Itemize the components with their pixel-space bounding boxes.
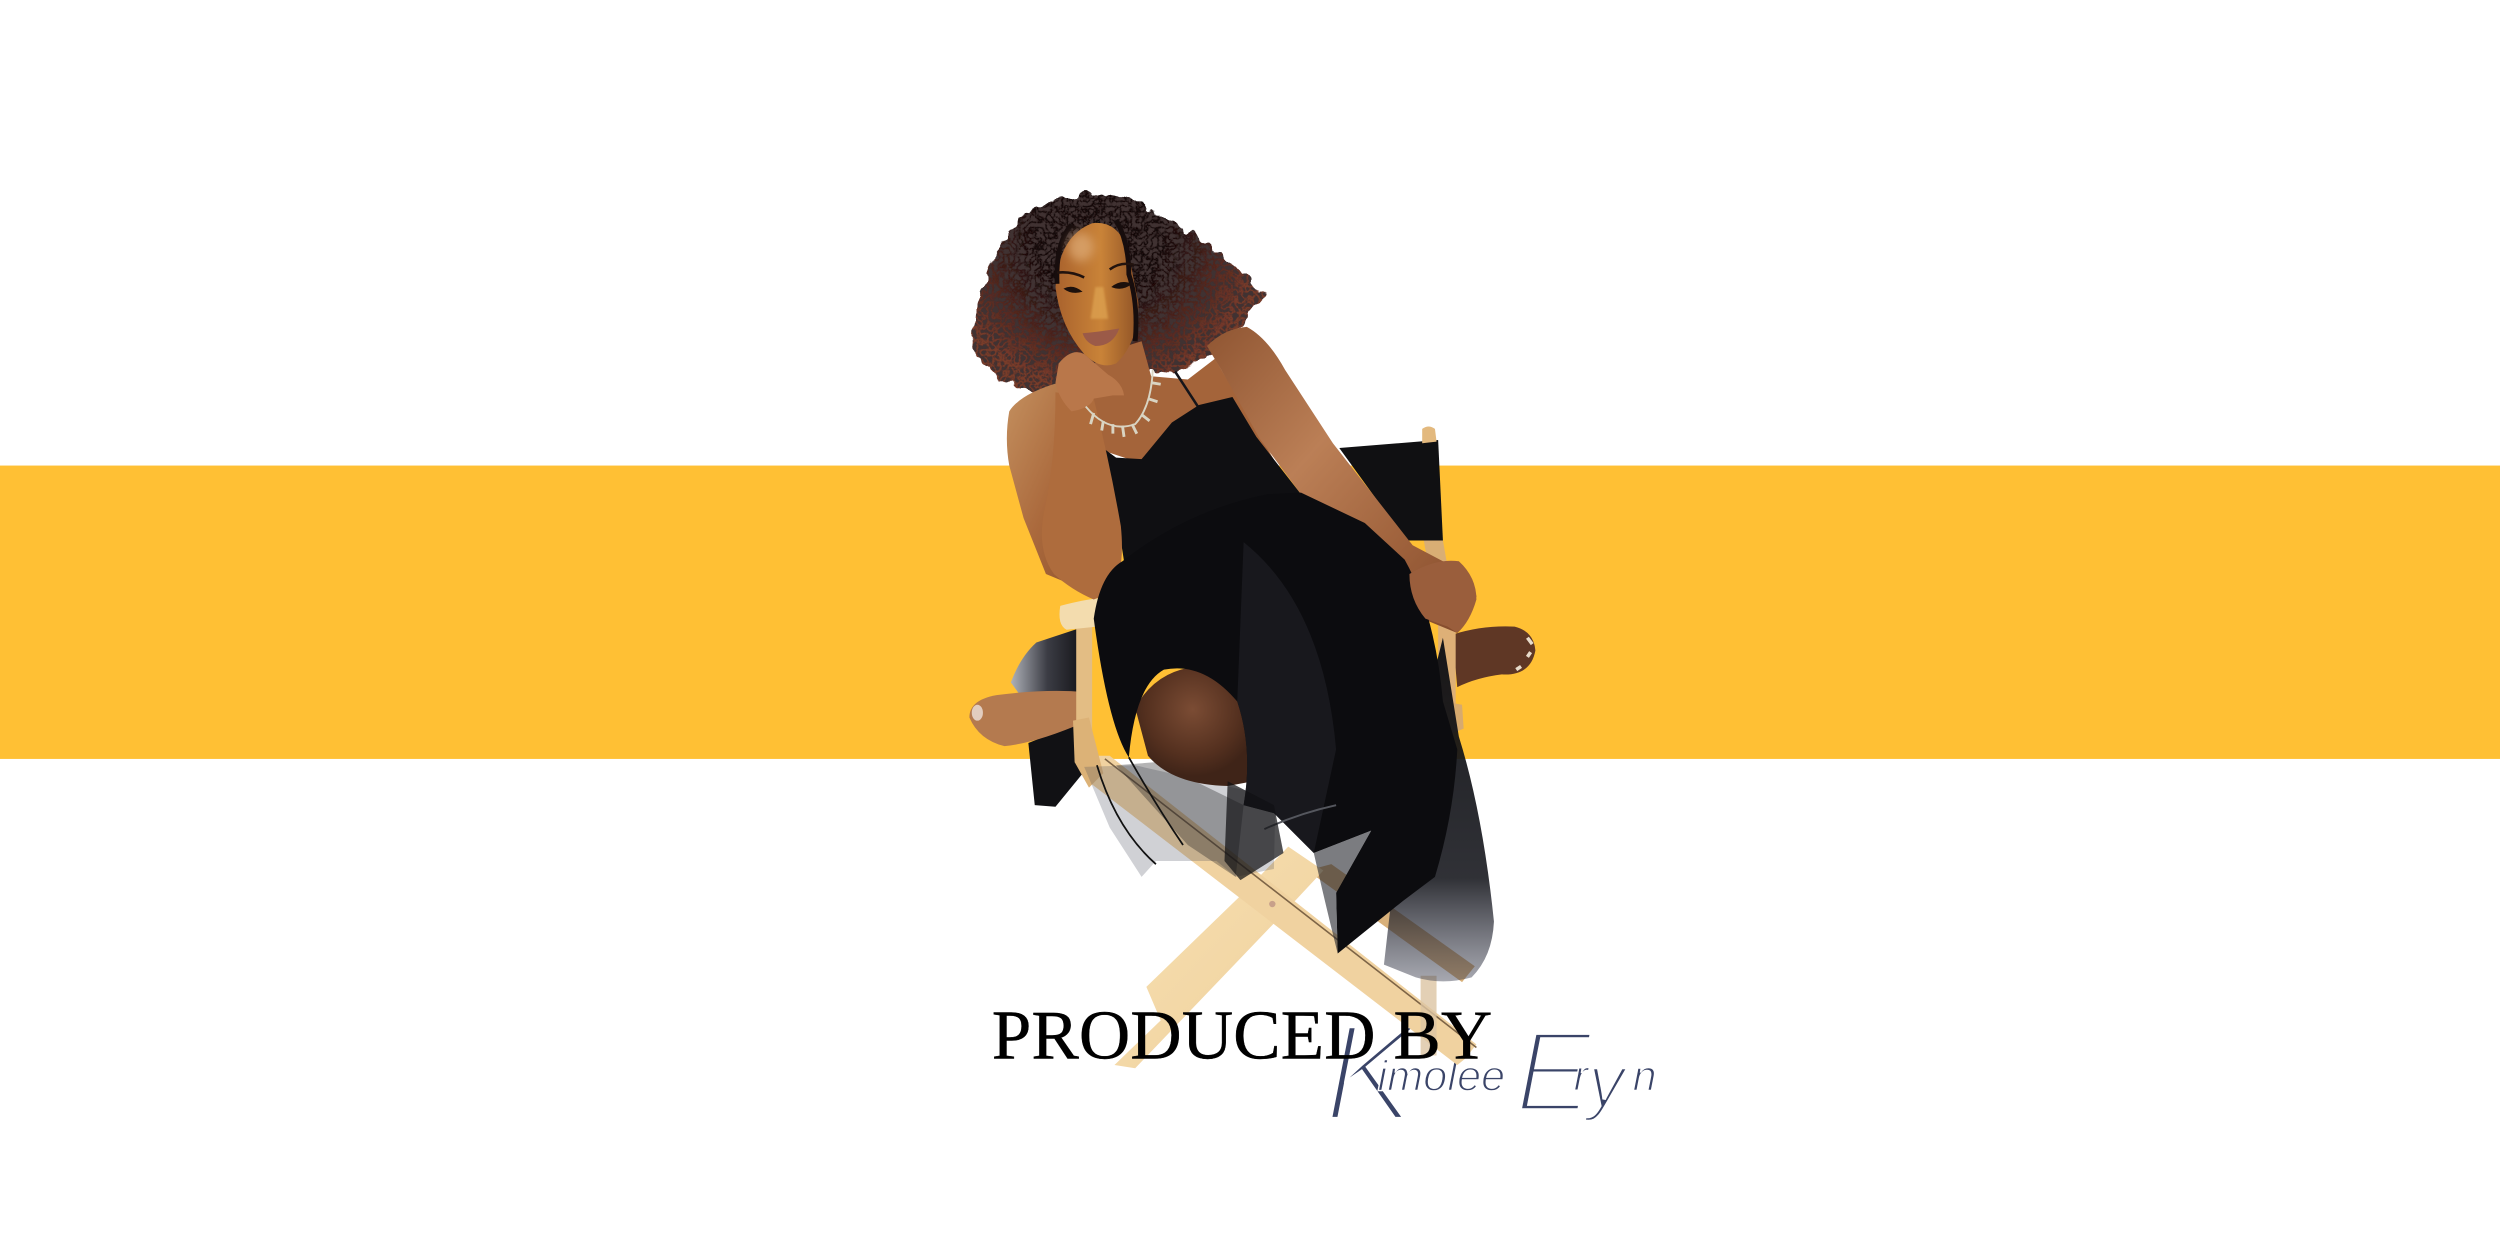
rear vertical post (1421, 976, 1437, 1055)
hair locks over face edge (1057, 220, 1136, 341)
bent knee under tulle (1135, 666, 1253, 786)
forehead highlight (1068, 233, 1094, 261)
nose highlight (1091, 287, 1108, 319)
fist under chin (1055, 352, 1124, 411)
front crossed leg (1087, 756, 1476, 1065)
left hem of dress, black cloth (1028, 721, 1084, 807)
yellow band (0, 466, 2500, 759)
sheer tulle behind left foot (1011, 628, 1084, 705)
eyebrows (1057, 264, 1134, 277)
signature: Kimolee Eryn: r (1574, 1053, 1590, 1101)
tulle edge strands (1097, 757, 1183, 864)
right shoulder and arm (1207, 327, 1476, 633)
sheer tulle, lower left (1084, 765, 1276, 877)
sheer tulle filling notch beside skirt tail (1314, 831, 1371, 953)
chair back canvas (1339, 426, 1448, 568)
upper body skin (1007, 327, 1476, 633)
left forearm (1042, 392, 1122, 599)
signature: Kimolee Eryn: E (1515, 1006, 1594, 1136)
face (1055, 220, 1138, 365)
dress bodice (1092, 397, 1301, 568)
lips (1083, 328, 1119, 346)
heading: produced by: PRODUCED BY (992, 998, 1492, 1075)
left foot (969, 691, 1084, 746)
dark tulle strands over chair leg (1116, 762, 1244, 877)
chest and neck (1071, 341, 1276, 466)
pivot bolt (1269, 901, 1276, 907)
hair (971, 195, 1264, 392)
chair frame (1059, 598, 1476, 1068)
left post (1076, 622, 1092, 737)
rear crossed leg (1114, 847, 1323, 1068)
left shoulder and upper arm (1007, 383, 1100, 590)
black tulle skirt (1094, 493, 1457, 953)
signature: Kimolee Eryn: n (1633, 1053, 1657, 1101)
tulle centre panel over chair (1224, 781, 1283, 880)
signature: Kimolee Eryn: y (1583, 1041, 1629, 1123)
sheer tulle, lower right (1384, 638, 1494, 981)
eyes (1063, 282, 1132, 293)
right hand (1409, 561, 1476, 633)
right foot (1452, 626, 1535, 687)
rear wooden rail (1307, 864, 1475, 982)
portrait: woman seated in director's chair (969, 195, 1535, 1068)
right post (1438, 619, 1456, 721)
strap (1175, 371, 1199, 408)
signature: Kimolee Eryn: K (1323, 994, 1422, 1151)
signature: Kimolee Eryn: imolee (1378, 1053, 1505, 1101)
spiked necklace (1086, 370, 1161, 437)
left armrest (1059, 598, 1102, 630)
